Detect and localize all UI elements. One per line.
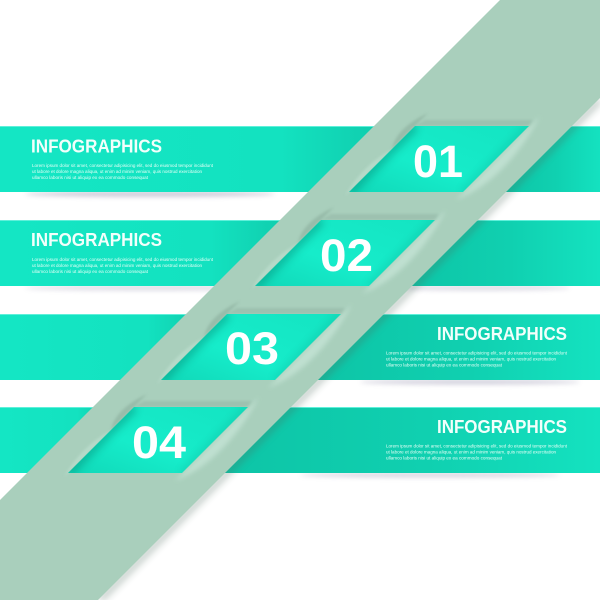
band 4 <box>0 407 600 473</box>
text block 2: ut labore et dolore magna aliqua, ut enim ad minim veniam, quis nostrud exercitation <box>32 263 202 269</box>
window 2 <box>251 207 446 294</box>
text block 3 <box>386 323 568 368</box>
text block 4: INFOGRAPHICS <box>437 416 567 437</box>
text block 2: ullamco laboris nisi ut aliquip ex ea commodo consequat <box>32 269 149 275</box>
text block 3: ullamco laboris nisi ut aliquip ex ea commodo consequat <box>386 362 503 368</box>
window 4 <box>64 394 259 481</box>
text block 4: ut labore et dolore magna aliqua, ut enim ad minim veniam, quis nostrud exercitation <box>386 450 556 456</box>
text block 3: INFOGRAPHICS <box>437 323 567 344</box>
text block 2: INFOGRAPHICS <box>31 229 162 250</box>
text block 1: Lorem ipsum dolor sit amet, consectetur adipisicing elit, sed do eiusmod tempor incididunt <box>32 163 214 169</box>
text block 4 <box>386 416 568 462</box>
text block 1 <box>31 136 214 181</box>
band 3 <box>0 314 600 380</box>
number 04: 04 <box>132 417 186 468</box>
band 2 <box>0 220 600 286</box>
text block 1: ut labore et dolore magna aliqua, ut enim ad minim veniam, quis nostrud exercitation <box>32 169 202 175</box>
band 1 <box>0 126 600 192</box>
text block 2: Lorem ipsum dolor sit amet, consectetur adipisicing elit, sed do eiusmod tempor incididunt <box>32 257 214 263</box>
window 1 <box>345 113 540 200</box>
text block 2 <box>31 229 214 275</box>
text block 1: INFOGRAPHICS <box>31 136 162 156</box>
strip shadow <box>100 100 600 600</box>
text block 3: Lorem ipsum dolor sit amet, consectetur adipisicing elit, sed do eiusmod tempor incididunt <box>386 350 568 356</box>
band shadows <box>25 191 580 477</box>
number 02: 02 <box>320 230 373 281</box>
text block 4: ullamco laboris nisi ut aliquip ex ea commodo consequat <box>386 456 503 462</box>
text block 1: ullamco laboris nisi ut aliquip ex ea commodo consequat <box>32 175 149 181</box>
number 03: 03 <box>225 323 279 374</box>
window 3 <box>157 301 352 388</box>
text block 3: ut labore et dolore magna aliqua, ut enim ad minim veniam, quis nostrud exercitation <box>386 356 556 362</box>
number 01: 01 <box>413 136 463 187</box>
text block 4: Lorem ipsum dolor sit amet, consectetur adipisicing elit, sed do eiusmod tempor incididunt <box>386 444 568 450</box>
